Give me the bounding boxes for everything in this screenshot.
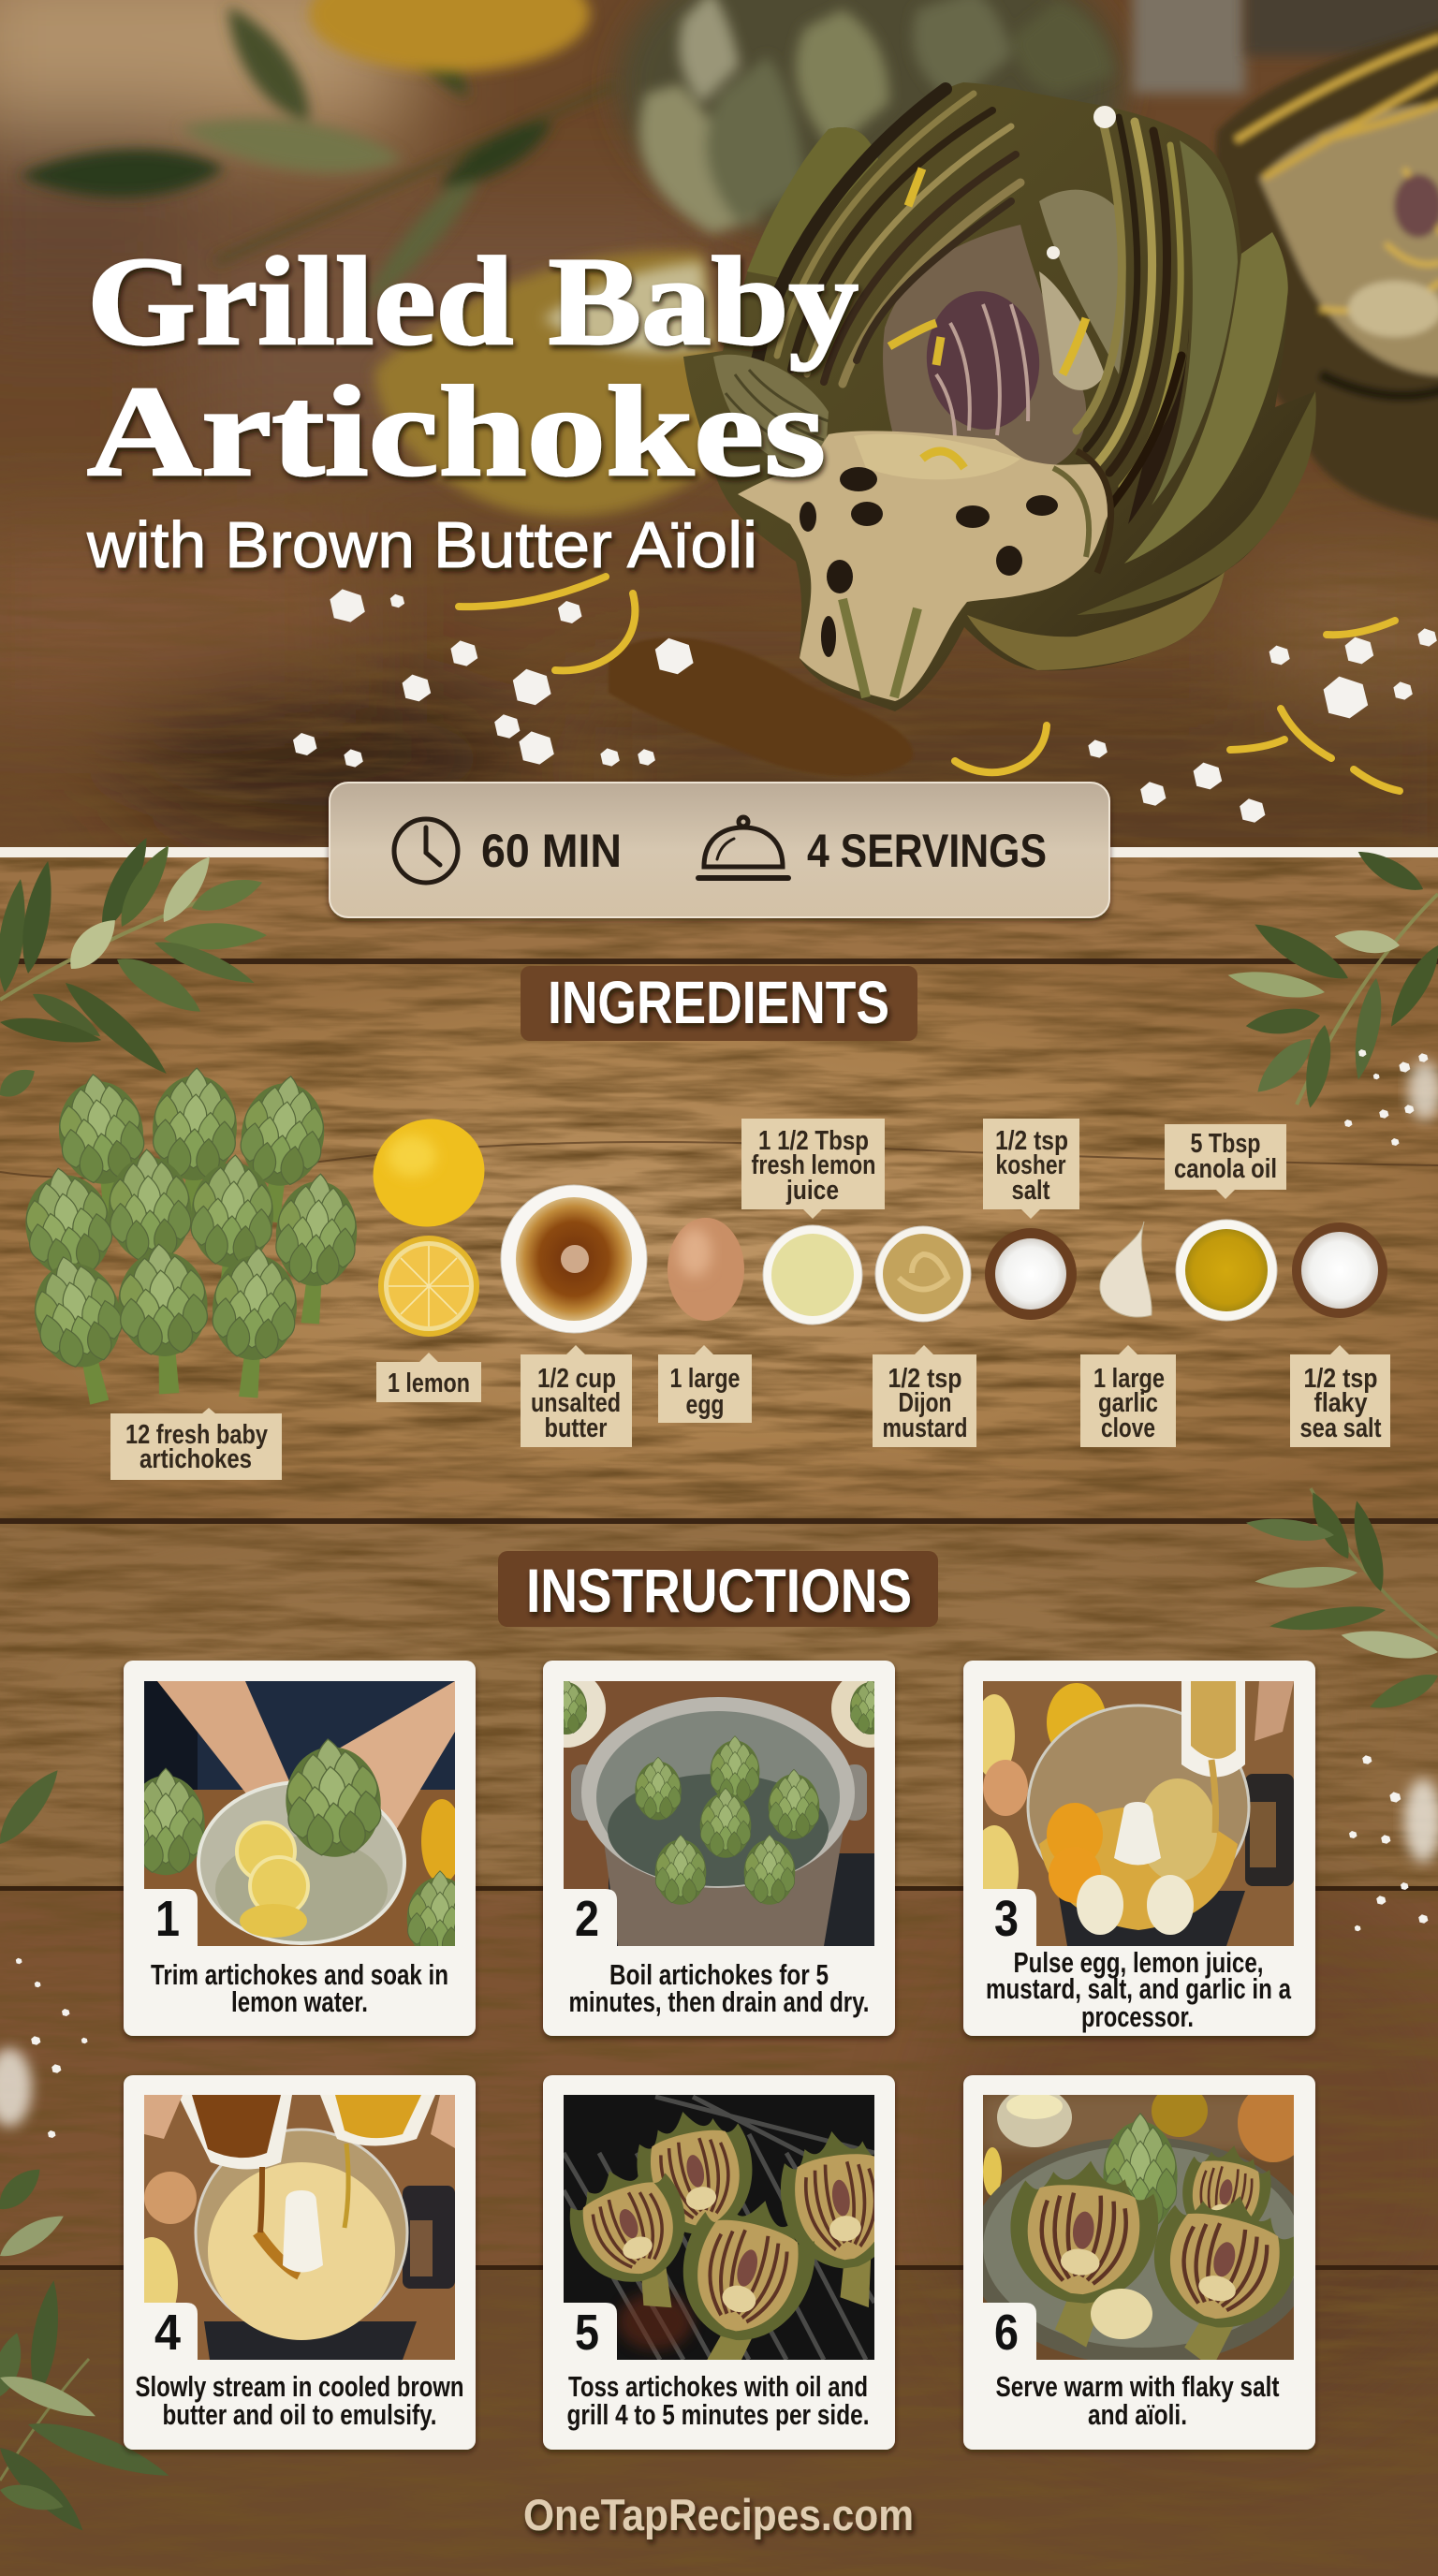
step 3 number: 3 [994,1891,1019,1947]
mustard bowl [875,1226,971,1322]
artichoke outer leaves [747,127,1316,670]
tag: sea salt: flaky [1314,1388,1367,1418]
blurred lemons [309,0,730,517]
tag: mustard: Dijon [899,1388,951,1418]
artichoke left fine lines [713,355,829,477]
blurred background leaves [18,0,618,319]
step 2 text: Boil artichokes for 5 [609,1958,829,1991]
tag: lemon juice: juice [785,1176,839,1206]
step card 6 [963,2075,1315,2450]
step 4 text: Slowly stream in cooled brown [135,2370,464,2403]
step 4 number tab [144,2303,198,2361]
step 6 text [996,2370,1279,2431]
step 5 text: Toss artichokes with oil and [568,2370,868,2403]
tag: garlic: 1 large [1093,1364,1165,1394]
step card 5 [543,2075,917,2450]
step 3 text: processor. [1081,2000,1194,2033]
step 5 photo [556,2095,917,2397]
olive leaf mid left [0,1762,66,1852]
tag: artichokes: artichokes [139,1444,252,1474]
step 3 text: Pulse egg, lemon juice, [1013,1946,1264,1979]
title [87,232,858,503]
tag: lemon [376,1353,481,1402]
tag: garlic: clove [1101,1413,1155,1443]
step 1 number tab [144,1889,198,1947]
tag: canola oil: 5 Tbsp [1191,1129,1260,1159]
salt scatter right [1344,1049,1438,1146]
tag: canola oil [1165,1124,1286,1199]
blurred background artichoke top [618,0,1438,243]
lemon half [378,1236,479,1337]
tag: kosher salt [983,1119,1079,1219]
salt scatter left [0,1958,88,2138]
tag: artichokes [110,1408,282,1480]
step card 4 [124,2075,476,2450]
tag: canola oil: canola oil [1174,1154,1277,1184]
lemon whole [356,1101,502,1245]
icon: clock [394,819,458,883]
hero divider [0,847,1438,857]
tag: mustard [873,1345,976,1447]
step 1 text [151,1958,448,2018]
egg [668,1218,744,1321]
title: Grilled Baby [87,232,858,372]
title: Artichokes [87,359,826,503]
ingredients heading: INGREDIENTS [548,969,889,1036]
step 2 number tab [564,1889,617,1947]
tag: artichokes: 12 fresh baby [125,1420,268,1450]
step 5 number: 5 [575,2305,599,2361]
step 5 text [567,2370,869,2431]
step 1 number: 1 [155,1891,180,1947]
artichoke cream centre [738,431,1110,701]
step 2 text [569,1958,869,2018]
step 6 text: Serve warm with flaky salt [996,2370,1279,2403]
step 3 number tab [983,1889,1036,1947]
olive branch bottom left [0,2160,173,2539]
flaky sea salt bowl [1292,1222,1387,1318]
canola oil bowl [1176,1220,1277,1321]
tag: butter: butter [545,1413,607,1443]
tag: butter [521,1345,632,1447]
servings text: 4 SERVINGS [807,825,1047,877]
olive branch top right [1225,843,1438,1110]
garlic clove [1100,1222,1152,1317]
brown butter bowl [501,1185,647,1333]
tag: sea salt: sea salt [1299,1413,1382,1443]
step 6 number tab [983,2303,1036,2361]
info pill [330,783,1109,917]
step card 1 [124,1661,476,2036]
tag: lemon: 1 lemon [388,1368,470,1398]
step card 3 [963,1661,1315,2036]
tag: garlic: garlic [1098,1388,1158,1418]
step 1 photo [126,1681,473,1961]
tag: mustard: mustard [882,1413,968,1443]
step 6 number: 6 [994,2305,1019,2361]
tag: lemon juice [741,1119,885,1219]
tag: egg [658,1345,752,1423]
tag: mustard: 1/2 tsp [888,1364,962,1394]
step 6 photo [969,2084,1315,2382]
step 1 text: lemon water. [231,1985,368,2018]
tag: egg: egg [685,1390,725,1420]
artichokes cluster [16,1066,360,1412]
artichoke ribbons [752,89,1181,520]
footer website: OneTapRecipes.com [523,2490,914,2539]
tag: kosher salt: salt [1011,1176,1050,1206]
lemon juice bowl [763,1225,862,1325]
step 3 photo [970,1681,1294,1946]
tag: garlic [1080,1345,1176,1447]
tag: sea salt [1290,1345,1390,1447]
tag: lemon juice: 1 1/2 Tbsp [758,1126,869,1156]
step 4 number: 4 [154,2305,181,2361]
tag: lemon juice: fresh lemon [751,1150,876,1180]
kosher salt bowl [985,1228,1077,1320]
step 3 text [986,1946,1292,2033]
step 2 photo [527,1669,910,1947]
step 4 text [135,2370,464,2431]
hero photo [0,0,1438,889]
time text: 60 MIN [481,825,622,877]
butter puddle [609,637,913,776]
zest and salt scatter [293,577,1437,823]
step 4 text: butter and oil to emulsify. [163,2398,436,2431]
tag: kosher salt: kosher [996,1150,1065,1180]
step 6 text: and aïoli. [1088,2398,1187,2431]
step 5 text: grill 4 to 5 minutes per side. [567,2398,869,2431]
step 2 text: minutes, then drain and dry. [569,1985,869,2018]
step card 2 [527,1661,910,2036]
instructions heading: INSTRUCTIONS [526,1556,912,1625]
main grilled artichoke [683,82,1316,711]
artichoke heart [883,190,1125,466]
step 1 text: Trim artichokes and soak in [151,1958,448,1991]
tag: butter: 1/2 cup [537,1364,616,1394]
olive branch top left [0,833,267,1104]
step 3 text: mustard, salt, and garlic in a [986,1972,1292,2005]
olive branch mid right [1244,1487,1438,1718]
tag: egg: 1 large [670,1364,740,1394]
tag: kosher salt: 1/2 tsp [995,1126,1068,1156]
step 4 photo [125,2095,455,2360]
salt scatter mid right [1349,1755,1438,1931]
tag: butter: unsalted [531,1388,621,1418]
icon: cloche [698,817,788,878]
right grilled artichoke [1215,19,1438,524]
step 2 number: 2 [575,1891,599,1947]
subtitle: with Brown Butter Aïoli [86,508,757,581]
step 5 number tab [564,2303,617,2361]
tag: sea salt: 1/2 tsp [1303,1364,1378,1394]
